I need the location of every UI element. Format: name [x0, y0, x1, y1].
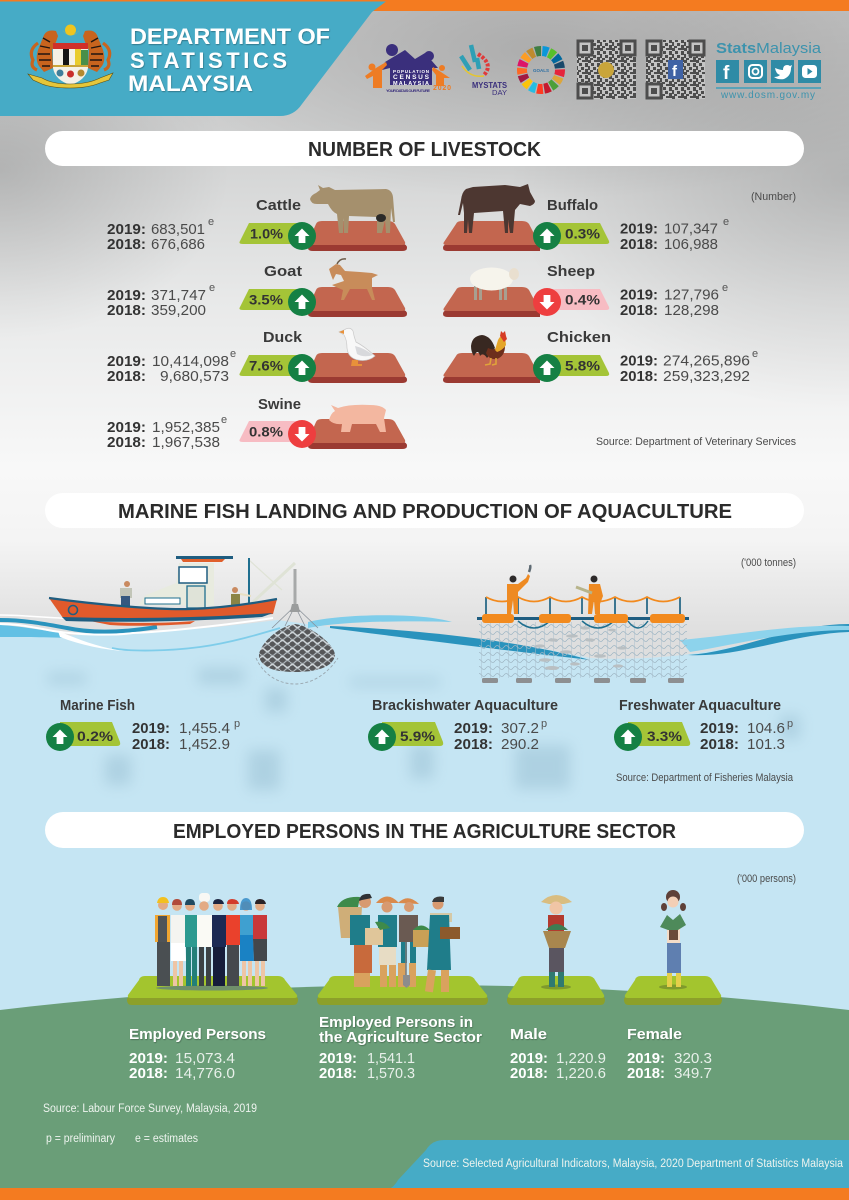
- worker: nurse: [171, 899, 186, 986]
- stat: marine fish: [46, 697, 240, 753]
- values: brackishwater: p: [541, 718, 547, 730]
- title: STATISTICS: [130, 48, 287, 73]
- values: marine fish: 2019:: [132, 721, 170, 737]
- legend: preliminary and estimates: e = estimates: [135, 1133, 198, 1145]
- label and values: [627, 1026, 712, 1082]
- label and values: the Agriculture Sector: [319, 1029, 482, 1046]
- platform: [507, 976, 605, 1005]
- logo: census 2020: 2020: [433, 85, 451, 92]
- values: freshwater: 2018:: [700, 737, 739, 753]
- star and crescent: [62, 24, 80, 36]
- values: marine fish: p: [234, 718, 240, 730]
- panel: swine: [107, 396, 407, 451]
- values: sheep: 2019:: [620, 288, 658, 304]
- panel: male: [507, 895, 606, 1082]
- values: swine: 1,952,385: [152, 420, 220, 436]
- change badge: marine up 0.2%: [46, 722, 120, 751]
- panel: sheep: Sheep: [547, 263, 595, 280]
- panel: sheep: [443, 263, 728, 319]
- panel: duck: [107, 328, 407, 385]
- icon: chicken: [471, 331, 507, 365]
- change badge: swine down 0.8%: [239, 420, 316, 448]
- change badge: freshwater up 3.3%: [614, 722, 690, 751]
- values: freshwater: 104.6: [747, 721, 785, 737]
- values: brackishwater: 290.2: [501, 737, 539, 753]
- heading: employed persons: EMPLOYED PERSONS IN THE AGRICULTURE SECTOR: [173, 821, 677, 843]
- values: brackishwater: 2019:: [454, 721, 493, 737]
- label and values: 349.7: [674, 1066, 712, 1082]
- stat: brackishwater aquaculture: [368, 697, 558, 753]
- icon: QR code facebook: f: [672, 63, 678, 80]
- values: sheep: 2018:: [620, 303, 658, 319]
- logo: SDG wheel: GOALS: [533, 68, 549, 73]
- waves: [0, 615, 849, 660]
- label and values: 2018:: [510, 1066, 548, 1082]
- StatsMalaysia social block: f: [723, 63, 730, 84]
- person: male farmer: [541, 895, 572, 990]
- change badge: chicken up 5.8%: 5.8%: [565, 358, 601, 374]
- values: duck: 2018:: [107, 369, 146, 385]
- unit: persons: ('000 persons): [737, 873, 796, 885]
- change badge: marine up 0.2%: 0.2%: [77, 728, 114, 744]
- logo: MyStats day: [461, 45, 508, 97]
- footer blue panel: [389, 1140, 849, 1189]
- values: brackishwater: 307.2: [501, 721, 539, 737]
- label and values: 2018:: [627, 1066, 665, 1082]
- change badge: sheep down 0.4%: [533, 288, 609, 316]
- heading: number of livestock: [45, 131, 804, 166]
- worker: medic: [185, 899, 198, 986]
- source: fisheries: Source: Department of Fisheries Malaysia: [616, 772, 794, 784]
- logo: MyStats day: DAY: [492, 88, 507, 97]
- legend: preliminary and estimates: [46, 1133, 198, 1145]
- values: duck: 9,680,573: [160, 369, 229, 385]
- label and values: 14,776.0: [175, 1066, 235, 1082]
- crane and mast: [249, 558, 295, 606]
- platform: [317, 976, 488, 1005]
- label and values: 2019:: [510, 1051, 548, 1067]
- legend: preliminary and estimates: p = preliminary: [46, 1133, 115, 1145]
- walkway and floats: [477, 597, 689, 628]
- panel: goat: Goat: [264, 263, 302, 280]
- worker: red shirt: [226, 899, 240, 986]
- values: buffalo: e: [723, 216, 729, 228]
- worker: woman red blouse: [253, 899, 267, 986]
- change badge: buffalo up 0.3%: [533, 222, 609, 250]
- change badge: sheep down 0.4%: 0.4%: [565, 292, 601, 308]
- values: cattle: 676,686: [151, 237, 205, 253]
- panel: chicken: Chicken: [547, 329, 611, 346]
- icon: QR code website: [577, 40, 636, 99]
- logo: SDG wheel: [522, 51, 560, 89]
- values: cattle: [107, 216, 214, 253]
- icon: sheep: [470, 268, 519, 300]
- label and values: 2018:: [319, 1066, 357, 1082]
- icon: cow: [310, 185, 395, 233]
- icon: buffalo: [458, 184, 535, 233]
- footer: [0, 1140, 849, 1200]
- people: farmers group: [337, 894, 460, 992]
- values: duck: 10,414,098: [152, 354, 229, 370]
- platform: [624, 976, 722, 1005]
- values: sheep: 127,796: [664, 288, 719, 304]
- values: goat: e: [209, 282, 215, 294]
- logo: MyStats day: MYSTATS: [472, 81, 508, 90]
- values: swine: 2019:: [107, 420, 146, 436]
- panel: cattle: Cattle: [256, 197, 301, 214]
- values: chicken: 2018:: [620, 369, 658, 385]
- cage net: [479, 622, 687, 678]
- panel: agriculture sector: [317, 894, 488, 1082]
- cabin: [138, 556, 233, 608]
- farmer three: [398, 898, 419, 987]
- basket of greens: [337, 897, 362, 938]
- aquaculture cage illustration: [477, 565, 689, 683]
- label and values: 1,220.6: [556, 1066, 606, 1082]
- unit: tonnes: ('000 tonnes): [741, 557, 796, 569]
- blurred water reflections: [48, 668, 800, 790]
- change badge: cattle up 1.0%: [239, 222, 316, 250]
- values: buffalo: [620, 216, 729, 253]
- stat: marine fish: Marine Fish: [60, 697, 135, 714]
- title: DEPARTMENT OF: [130, 24, 330, 49]
- panel: cattle: [107, 185, 407, 253]
- produce box: [365, 922, 390, 945]
- stat: brackishwater aquaculture: Brackishwater Aquaculture: [372, 697, 558, 714]
- change badge: swine down 0.8%: 0.8%: [249, 424, 284, 440]
- values: freshwater: p: [787, 718, 793, 730]
- people: workers group: [155, 893, 268, 990]
- label and values: 320.3: [674, 1051, 712, 1067]
- values: chicken: 274,265,896: [663, 354, 750, 370]
- values: goat: [107, 282, 215, 319]
- title: [128, 24, 330, 96]
- produce crate: [413, 926, 430, 947]
- values: cattle: e: [208, 216, 214, 228]
- heading: marine fish: MARINE FISH LANDING AND PRODUCTION OF AQUACULTURE: [118, 501, 732, 523]
- stat: freshwater aquaculture: [614, 697, 793, 753]
- values: marine fish: 1,455.4: [179, 721, 230, 737]
- logo: census 2020: POPULATION: [393, 69, 429, 74]
- heading: marine fish: [45, 493, 804, 528]
- hull: [49, 598, 277, 626]
- worker right: [576, 576, 603, 614]
- panel: duck: Duck: [263, 329, 303, 346]
- values: swine: e: [221, 414, 227, 426]
- label and values: 1,570.3: [367, 1066, 415, 1082]
- values: sheep: 128,298: [664, 303, 719, 319]
- values: marine fish: 2018:: [132, 737, 170, 753]
- icon: duck: [339, 328, 375, 366]
- label and values: Male: [510, 1026, 547, 1043]
- stat: freshwater aquaculture: Freshwater Aquaculture: [619, 697, 781, 714]
- change badge: cattle up 1.0%: 1.0%: [250, 226, 284, 242]
- change badge: duck up 7.6%: [239, 354, 316, 382]
- shield: [53, 43, 88, 85]
- values: swine: [107, 414, 227, 451]
- values: cattle: 683,501: [151, 222, 205, 238]
- StatsMalaysia social block: [716, 41, 822, 101]
- platform: [127, 976, 298, 1005]
- label and values: Employed Persons: [129, 1026, 266, 1043]
- heading: employed persons: [45, 812, 804, 848]
- label and values: Employed Persons in: [319, 1014, 473, 1031]
- values: buffalo: 106,988: [664, 237, 718, 253]
- farmer four: [425, 897, 452, 992]
- worker: chef: [197, 893, 213, 986]
- heading: number of livestock: NUMBER OF LIVESTOCK: [308, 139, 542, 161]
- values: goat: 2018:: [107, 303, 146, 319]
- weights: [482, 678, 684, 683]
- fisherman left: [120, 581, 132, 608]
- values: sheep: e: [722, 282, 728, 294]
- change badge: brackishwater up 5.9%: [368, 722, 443, 751]
- logo: census 2020: YOUR DATA IS OUR FUTURE: [386, 88, 430, 93]
- fish net with catch: [256, 604, 338, 684]
- shovel: [403, 942, 410, 988]
- worker left: [507, 565, 530, 614]
- values: brackishwater: [454, 718, 547, 753]
- panel: female: [624, 890, 722, 1082]
- values: chicken: [620, 348, 758, 385]
- StatsMalaysia social block: www.dosm.gov.my: [720, 90, 815, 101]
- source: labour force survey: Source: Labour Force Survey, Malaysia, 2019: [43, 1103, 257, 1115]
- label and values: 1,220.9: [556, 1051, 606, 1067]
- source: veterinary: Source: Department of Veterinary Services: [596, 436, 796, 448]
- label and values: Female: [627, 1026, 682, 1043]
- values: goat: 2019:: [107, 288, 146, 304]
- sea: [0, 620, 849, 1020]
- values: buffalo: 107,347: [664, 222, 718, 238]
- header: [0, 0, 849, 116]
- values: swine: 2018:: [107, 435, 146, 451]
- fishing boat illustration: [49, 556, 295, 626]
- values: chicken: e: [752, 348, 758, 360]
- label and values: [129, 1026, 266, 1082]
- orange top band: [0, 0, 849, 11]
- label and values: 1,541.1: [367, 1051, 415, 1067]
- person: female farmer: [659, 890, 687, 990]
- carried box: [440, 927, 460, 939]
- label and values: 15,073.4: [175, 1051, 235, 1067]
- values: duck: [107, 348, 236, 385]
- label and values: [510, 1026, 606, 1082]
- green hill: [0, 985, 849, 1200]
- StatsMalaysia social block: Stats Malaysia: [716, 41, 822, 57]
- values: duck: 2019:: [107, 354, 146, 370]
- fisherman right: [231, 587, 251, 607]
- icon: goat: [329, 259, 378, 300]
- ribbon: [28, 73, 113, 88]
- title: MALAYSIA: [128, 71, 253, 96]
- panel: buffalo: [443, 184, 729, 253]
- panel: chicken: [443, 329, 758, 385]
- worker: flight attendant: [240, 898, 254, 986]
- change badge: goat up 3.5%: 3.5%: [249, 292, 284, 308]
- label and values: 2019:: [319, 1051, 357, 1067]
- values: duck: e: [230, 348, 236, 360]
- values: swine: 1,967,538: [152, 435, 220, 451]
- label and values: [319, 1014, 482, 1082]
- values: buffalo: 2019:: [620, 222, 658, 238]
- orange bottom band: [0, 1188, 849, 1200]
- values: marine fish: [132, 718, 240, 753]
- icon: pig: [329, 405, 386, 432]
- farmer two: [376, 896, 399, 987]
- values: marine fish: 1,452.9: [179, 737, 230, 753]
- change badge: duck up 7.6%: 7.6%: [249, 358, 284, 374]
- panel: goat: [107, 259, 407, 319]
- values: freshwater: [700, 718, 793, 753]
- values: freshwater: 2019:: [700, 721, 739, 737]
- logo: census 2020: CENSUS: [393, 74, 430, 81]
- change badge: freshwater up 3.3%: 3.3%: [647, 728, 683, 744]
- blue title panel: [0, 2, 386, 116]
- values: sheep: [620, 282, 728, 319]
- change badge: chicken up 5.8%: [533, 354, 609, 382]
- unit: number: (Number): [751, 191, 796, 203]
- values: cattle: 2018:: [107, 237, 146, 253]
- icon: QR code facebook: [646, 40, 705, 99]
- values: goat: 371,747: [151, 288, 206, 304]
- values: chicken: 2019:: [620, 354, 658, 370]
- change badge: brackishwater up 5.9%: 5.9%: [400, 728, 436, 744]
- panel: swine: Swine: [258, 396, 301, 413]
- worker: construction: [155, 897, 170, 986]
- panel: employed persons: [127, 893, 298, 1082]
- values: freshwater: 101.3: [747, 737, 785, 753]
- tiger left: [31, 30, 58, 72]
- values: chicken: 259,323,292: [663, 369, 750, 385]
- panel: buffalo: Buffalo: [547, 197, 598, 214]
- logo: census 2020: MALAYSIA: [393, 81, 429, 87]
- values: buffalo: 2018:: [620, 237, 658, 253]
- icon: coat of arms: [28, 24, 113, 88]
- farmed fish: [535, 626, 627, 670]
- values: cattle: 2019:: [107, 222, 146, 238]
- background shading: [0, 0, 849, 410]
- worker: pilot: [212, 899, 226, 986]
- values: brackishwater: 2018:: [454, 737, 493, 753]
- change badge: goat up 3.5%: [239, 288, 316, 316]
- tiger right: [83, 30, 110, 72]
- label and values: 2019:: [627, 1051, 665, 1067]
- label and values: 2018:: [129, 1066, 168, 1082]
- values: goat: 359,200: [151, 303, 206, 319]
- label and values: 2019:: [129, 1051, 168, 1067]
- change badge: buffalo up 0.3%: 0.3%: [565, 226, 601, 242]
- logo: census 2020: [365, 44, 451, 93]
- farmer one: [350, 894, 372, 987]
